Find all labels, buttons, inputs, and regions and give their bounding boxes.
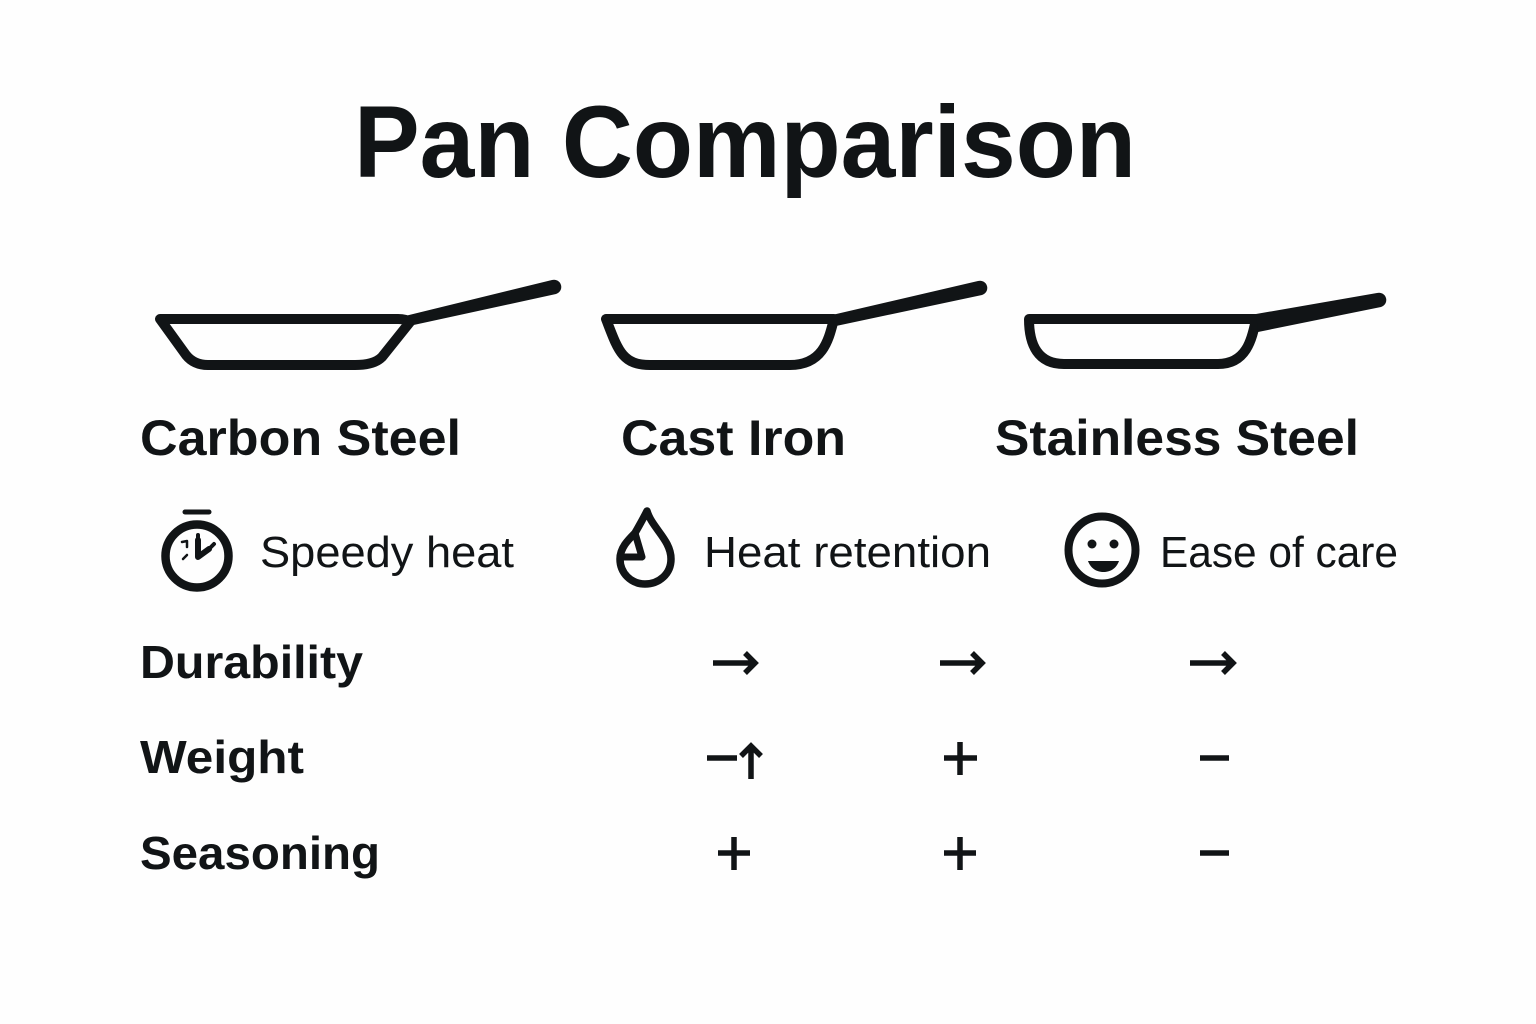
seasoning: carbon steel plus [718, 837, 750, 870]
icon: stainless steel pan [1029, 293, 1386, 364]
title: Pan Comparison [354, 85, 1136, 199]
weight: carbon steel minus and up arrow [707, 746, 761, 779]
row label: Seasoning: Seasoning [140, 827, 380, 879]
icon: cast iron pan [606, 281, 987, 365]
icon: carbon steel pan [160, 280, 561, 365]
row label: Durability: Durability [140, 636, 363, 688]
heading: Cast Iron: Cast Iron [621, 410, 846, 466]
durability: stainless steel arrow [1190, 653, 1233, 673]
label: Ease of care: Ease of care [1160, 528, 1398, 577]
seasoning: stainless steel minus [1200, 850, 1229, 856]
heading: Stainless Steel: Stainless Steel [995, 410, 1359, 466]
icon: water drop [620, 511, 671, 584]
durability: cast iron arrow [940, 653, 982, 673]
label: Speedy heat: Speedy heat [260, 528, 514, 577]
row label: Weight: Weight [140, 731, 304, 783]
heading: Carbon Steel: Carbon Steel [140, 410, 461, 466]
icon: stopwatch [166, 512, 228, 588]
label: Heat retention: Heat retention [704, 528, 991, 577]
weight: stainless steel minus [1200, 755, 1229, 761]
durability: carbon steel arrow [713, 653, 755, 673]
weight: cast iron plus [944, 742, 977, 775]
seasoning: cast iron plus [944, 837, 976, 870]
icon: smiley face [1068, 516, 1136, 584]
